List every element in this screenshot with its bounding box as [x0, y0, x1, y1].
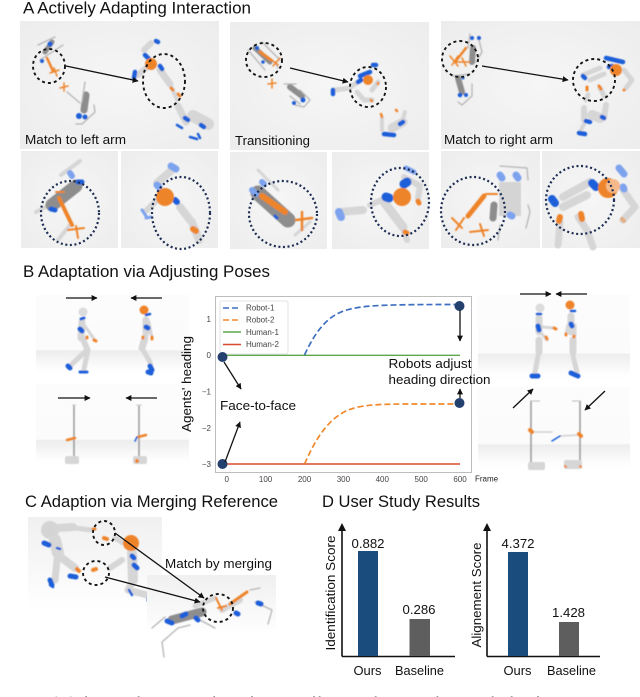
panel A: match to right arm humanoid crop — [542, 151, 640, 248]
x tick labels — [224, 475, 467, 484]
arrows — [224, 310, 460, 462]
panel A: transitioning robot crop — [230, 152, 327, 249]
x tick labels: 600 — [453, 475, 467, 484]
x tick labels: 100 — [259, 475, 273, 484]
robot-1 curve — [304, 304, 460, 355]
panel A: match to left arm overview — [20, 21, 219, 149]
arrow down-left — [585, 391, 605, 410]
bar: baseline — [559, 622, 579, 656]
label: Match to left arm — [25, 132, 126, 147]
arrow left — [131, 297, 162, 299]
y tick labels: −2 — [202, 424, 212, 433]
arrow — [482, 66, 568, 80]
panel C: merging reference — [28, 517, 276, 657]
panel B: humanoids far apart — [36, 295, 189, 375]
y tick labels: 1 — [207, 315, 212, 324]
markers — [218, 301, 464, 469]
y tick labels — [202, 315, 212, 469]
arrow up-right — [513, 389, 533, 408]
bar chart: alignement score: 4.372 — [502, 536, 534, 551]
y tick labels: 0 — [207, 351, 212, 360]
panel A: match to left arm humanoid crop — [121, 151, 218, 249]
legend: Human-1 — [246, 328, 279, 337]
bar chart: identification score: 0.286 — [402, 602, 436, 617]
bar: ours — [358, 551, 378, 656]
y tick labels: −3 — [202, 460, 212, 469]
arrow left — [126, 397, 157, 399]
panel A: transitioning humanoid crop — [332, 152, 429, 249]
bar: baseline — [410, 619, 430, 656]
x tick labels: 200 — [298, 475, 312, 484]
humanoid image — [28, 517, 162, 610]
bar chart: alignement score: Alignement Score — [469, 543, 484, 647]
human-2 line — [226, 463, 460, 465]
arrow left — [556, 293, 587, 295]
bar chart: identification score: Baseline — [395, 663, 444, 678]
bar chart: identification score — [323, 523, 455, 678]
dashed circles — [83, 521, 233, 622]
x tick labels: 400 — [376, 475, 390, 484]
annotation: robots adjust heading direction: Robots adjust — [388, 356, 472, 371]
robot-2 curve — [304, 404, 460, 464]
x axis label: Frame — [475, 474, 499, 484]
x tick labels: 500 — [415, 475, 428, 484]
bar chart: identification score: Identification Score — [323, 536, 338, 650]
panel A: transitioning overview — [230, 22, 429, 150]
legend: Robot-1 — [246, 304, 275, 312]
panel B: mobile robots far apart — [36, 384, 189, 465]
y axis title: Agents' heading — [179, 336, 194, 432]
annotation: face-to-face: Face-to-face — [220, 398, 296, 413]
bar chart: alignement score: 1.428 — [552, 605, 585, 620]
robots left — [38, 37, 95, 124]
label: Match to right arm — [444, 132, 553, 147]
legend: Human-2 — [246, 340, 279, 349]
human-1 line — [226, 354, 460, 356]
arrow right — [520, 293, 551, 295]
label: Match by merging — [165, 556, 272, 571]
y tick labels: −1 — [202, 388, 212, 396]
panel B: mobile robots face to face — [478, 387, 630, 470]
quadruped image — [147, 575, 276, 657]
arrow right — [58, 397, 90, 399]
panel A: match to right arm overview — [441, 21, 640, 149]
arrows — [105, 533, 204, 602]
arrow — [290, 68, 348, 82]
panel A: match to left arm robot crop — [21, 151, 118, 248]
legend: Robot-2 — [246, 316, 275, 324]
panel A: match to right arm robot crop — [441, 151, 540, 248]
legend — [220, 301, 288, 354]
bar chart: alignement score: Baseline — [547, 663, 596, 678]
panel B: humanoids face to face — [478, 294, 630, 380]
bar: ours — [508, 552, 528, 656]
axes — [487, 528, 600, 656]
bar chart: identification score: Ours — [354, 663, 382, 678]
humanoid — [134, 41, 208, 139]
x tick labels: 300 — [337, 475, 351, 484]
title: B Adaptation via Adjusting Poses: B Adaptation via Adjusting Poses — [23, 262, 270, 281]
arrow right — [66, 297, 97, 299]
title: D User Study Results: D User Study Results — [322, 492, 480, 511]
line chart: agents' heading — [179, 296, 499, 484]
axes — [342, 528, 455, 656]
title: C Adaption via Merging Reference: C Adaption via Merging Reference — [25, 492, 278, 511]
bar chart: alignement score: Ours — [504, 663, 532, 678]
x tick labels: 0 — [224, 475, 229, 484]
annotation: robots adjust heading direction — [388, 356, 490, 387]
annotation: robots adjust heading direction: heading direction — [388, 372, 490, 387]
arrow — [66, 66, 138, 81]
bar chart: identification score: 0.882 — [352, 536, 384, 551]
bar chart: alignement score — [469, 523, 600, 678]
label: Transitioning — [235, 133, 310, 148]
